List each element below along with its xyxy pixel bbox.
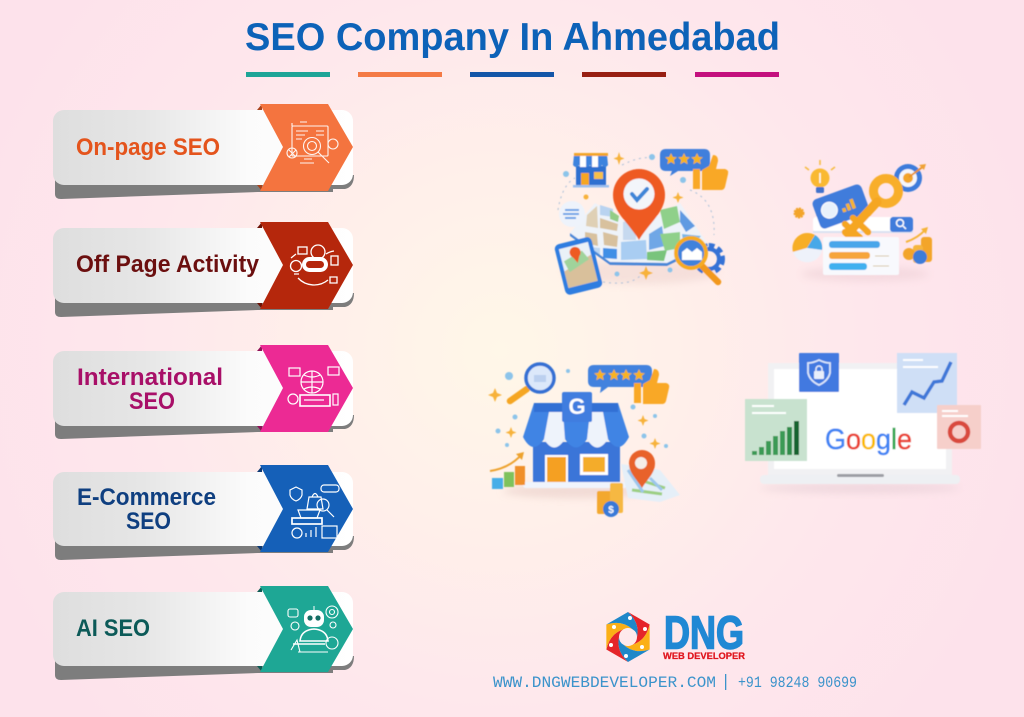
- DNG wordmark: DNG: [664, 606, 744, 658]
- illustration: SEO keyword key: [792, 160, 932, 281]
- illustration: Google business store: [488, 364, 680, 517]
- coins: $: [608, 505, 614, 516]
- phone with map: [554, 236, 603, 296]
- keyword panel: [823, 237, 899, 275]
- trend card: [897, 353, 957, 413]
- small gear: [794, 208, 804, 218]
- contact line: +91 98248 90699: [738, 674, 857, 692]
- Google wordmark: Google: [825, 424, 912, 456]
- gear and magnifier: [676, 238, 721, 282]
- panel: On-page SEO: [53, 104, 354, 199]
- title colour bars: [246, 72, 779, 77]
- magnifier: [510, 364, 554, 401]
- illustration: laptop with Google: [745, 353, 981, 493]
- donut card: [937, 405, 981, 449]
- dotted route: [558, 158, 714, 283]
- panel: E-Commerce SEO: [53, 465, 354, 560]
- laptop: [760, 363, 960, 484]
- storefront: [573, 153, 609, 188]
- label: SEO: SEO: [126, 508, 171, 535]
- panel: Off Page Activity: [53, 222, 354, 317]
- label: AI SEO: [76, 615, 150, 642]
- idea bulb: [805, 160, 835, 193]
- striped awning: [523, 403, 629, 448]
- logo mark: [596, 606, 660, 668]
- label: SEO: SEO: [129, 388, 175, 415]
- label: On-page SEO: [76, 134, 220, 161]
- label: E-Commerce: E-Commerce: [77, 484, 216, 511]
- mini map: [621, 464, 680, 502]
- title: SEO Company In Ahmedabad: [245, 16, 780, 59]
- contact line: WWW.DNGWEBDEVELOPER.COM: [493, 674, 716, 692]
- icon: globe: [288, 367, 339, 406]
- search bar: [813, 217, 913, 233]
- store body: [523, 442, 627, 488]
- blue dots: [563, 154, 686, 276]
- review bubble: [588, 365, 669, 404]
- coins: [597, 483, 623, 517]
- target: [894, 164, 926, 192]
- shield card: [799, 353, 839, 392]
- location pin: [613, 169, 665, 240]
- rating bubble: [660, 149, 728, 190]
- G tile: [562, 392, 592, 422]
- golden key: [845, 178, 898, 240]
- illustration: local map: [554, 149, 728, 296]
- icon: shopping: [290, 485, 339, 538]
- icon: link network: [290, 245, 338, 285]
- panel: AI SEO: [53, 586, 354, 680]
- green bars card: [745, 399, 807, 461]
- label: Off Page Activity: [76, 251, 260, 278]
- contact line: [493, 674, 857, 692]
- WEB DEVELOPER tagline: WEB DEVELOPER: [663, 651, 745, 662]
- map pin: [629, 450, 655, 488]
- logo: DNG Web Developer: [596, 606, 745, 668]
- sparkles: [584, 152, 684, 280]
- label: International: International: [77, 364, 223, 391]
- icon: audit magnifier: [287, 122, 338, 163]
- coins and arrow: [903, 227, 932, 264]
- sparkles and dots: [488, 388, 660, 449]
- growth chart: [490, 452, 525, 489]
- icon: robot: [288, 606, 338, 652]
- pie chart: [792, 233, 822, 262]
- chat bubble: [559, 201, 585, 227]
- folded map: [570, 203, 708, 266]
- G tile: G: [568, 394, 586, 419]
- panel: International SEO: [53, 345, 354, 439]
- blue tag: [811, 183, 871, 230]
